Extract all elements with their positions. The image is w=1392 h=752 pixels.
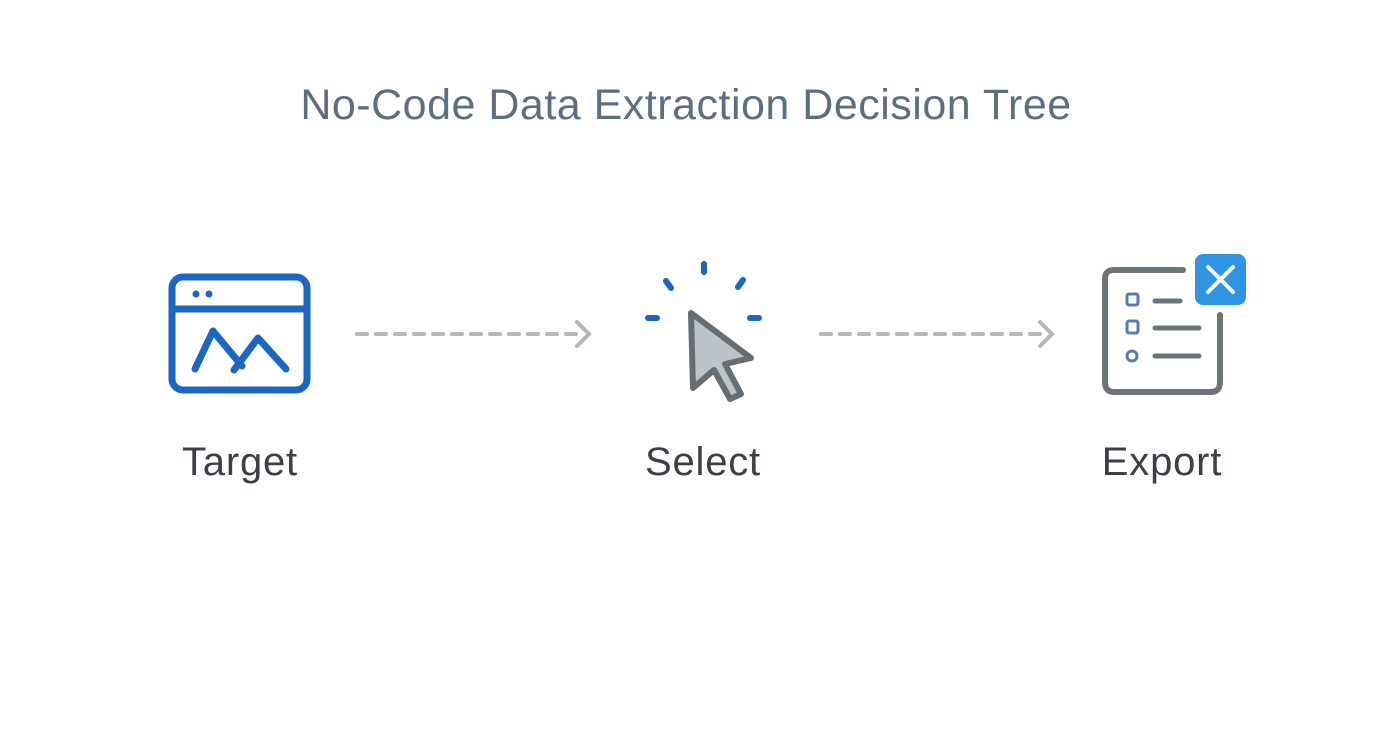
icon: checklist document with badge (Export) [1105,254,1246,392]
label: Export: Export [1102,440,1222,484]
title: No-Code Data Extraction Decision Tree [300,81,1072,129]
label: Select: Select [645,440,761,484]
icon: browser window (Target) [172,277,307,390]
icon: cursor (Select) [648,264,759,399]
label: Target: Target [182,440,298,484]
arrow: select to export [821,322,1052,346]
arrow: target to select [357,322,589,346]
